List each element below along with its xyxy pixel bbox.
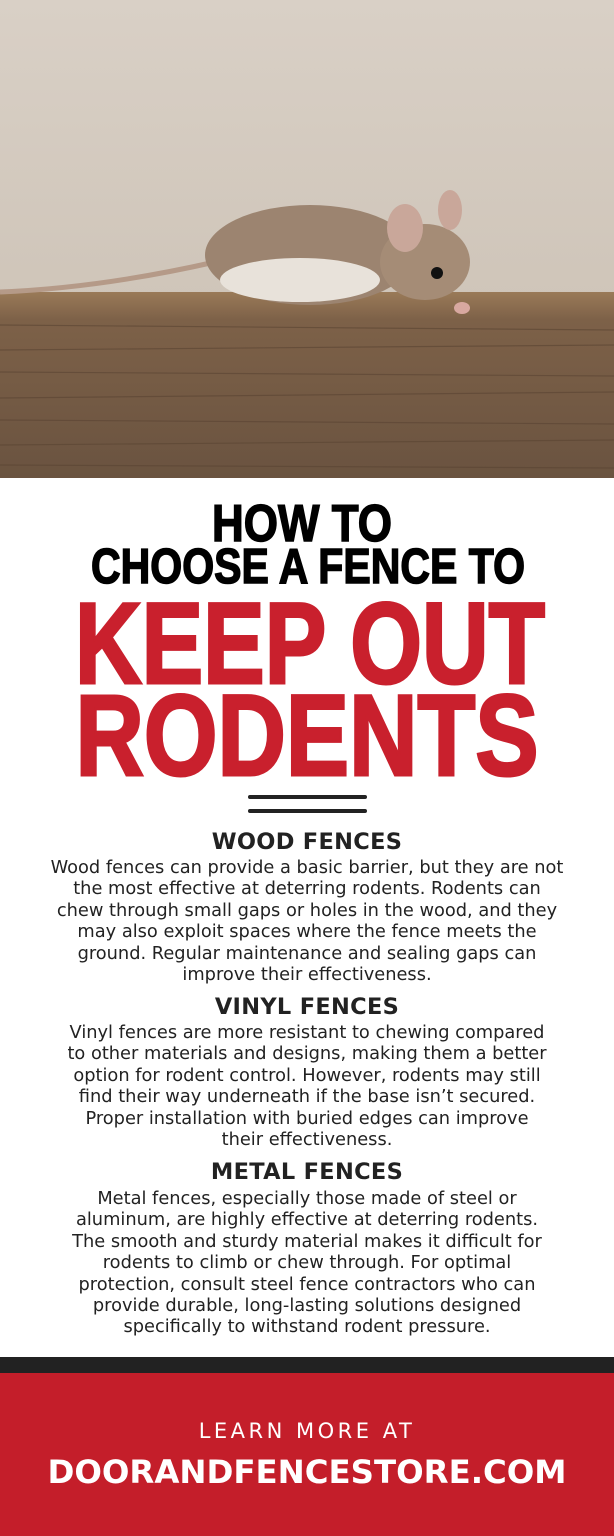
title: HOW TO bbox=[212, 495, 392, 553]
footer text: url: DOORANDFENCESTORE.COM bbox=[47, 1453, 567, 1491]
text: vinyl: find their way underneath if the base isn’t secured. bbox=[79, 1086, 535, 1107]
text: wood: improve their effectiveness. bbox=[182, 964, 432, 985]
text: metal: specifically to withstand rodent pressure. bbox=[123, 1316, 491, 1337]
text: vinyl: Vinyl fences are more resistant to chewing compared bbox=[70, 1022, 544, 1043]
title: CHOOSE A FENCE TO bbox=[91, 540, 525, 594]
text: wood: Wood fences can provide a basic barrier, but they are not bbox=[51, 857, 563, 878]
heading: vinyl fences: VINYL FENCES bbox=[215, 994, 399, 1020]
text: wood: chew through small gaps or holes in the wood, and they bbox=[57, 900, 557, 921]
footer bbox=[0, 1357, 614, 1536]
text: vinyl bbox=[67, 1022, 547, 1150]
title bbox=[75, 495, 546, 785]
text: vinyl: to other materials and designs, making them a better bbox=[67, 1043, 547, 1064]
text: vinyl: their effectiveness. bbox=[222, 1129, 392, 1150]
heading: wood fences: WOOD FENCES bbox=[212, 829, 402, 855]
text: metal: The smooth and sturdy material makes it difficult for bbox=[72, 1231, 542, 1252]
text: metal: aluminum, are highly effective at deterring rodents. bbox=[76, 1209, 538, 1230]
text: metal: protection, consult steel fence contractors who can bbox=[79, 1274, 535, 1295]
text: vinyl: option for rodent control. However, rodents may still bbox=[73, 1065, 541, 1086]
text: metal: Metal fences, especially those made of steel or bbox=[97, 1188, 517, 1209]
text: vinyl: Proper installation with buried edges can improve bbox=[85, 1108, 529, 1129]
text: wood bbox=[51, 857, 563, 985]
heading: metal fences: METAL FENCES bbox=[211, 1159, 403, 1185]
text: metal: provide durable, long-lasting solutions designed bbox=[93, 1295, 521, 1316]
photo: mouse on wooden fence bbox=[0, 0, 614, 478]
text: wood: the most effective at deterring rodents. Rodents can bbox=[73, 878, 541, 899]
footer text: learn more: LEARN MORE AT bbox=[199, 1419, 415, 1443]
text: wood: ground. Regular maintenance and sealing gaps can bbox=[78, 943, 536, 964]
text: metal bbox=[72, 1188, 542, 1337]
mouse bbox=[0, 190, 470, 314]
text: metal: rodents to climb or chew through. For optimal bbox=[103, 1252, 511, 1273]
text: wood: may also exploit spaces where the fence meets the bbox=[77, 921, 537, 942]
